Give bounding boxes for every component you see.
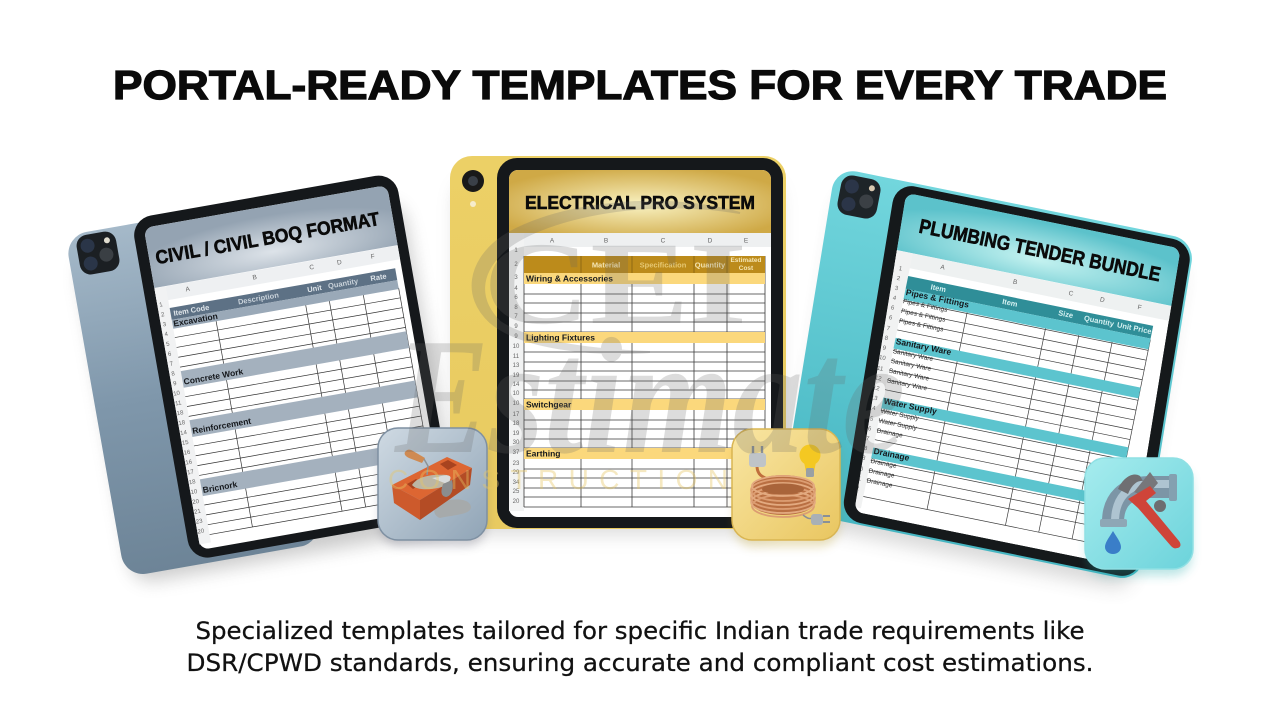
- electrical spreadsheet: D: [708, 238, 713, 244]
- electrical spreadsheet: 23: [513, 461, 520, 467]
- civil spreadsheet: C: [309, 264, 315, 272]
- civil spreadsheet: 18: [178, 420, 186, 427]
- electrical spreadsheet: 34: [513, 480, 520, 486]
- electrical spreadsheet: 4: [514, 286, 518, 292]
- electrical spreadsheet: 11: [513, 354, 520, 360]
- panel: civil tablet: [64, 172, 459, 585]
- civil camera: [75, 230, 121, 276]
- plumbing spreadsheet: 8: [884, 336, 889, 342]
- electrical spreadsheet: 6: [514, 295, 518, 301]
- plumbing spreadsheet: Drainage: [868, 468, 895, 480]
- plumbing spreadsheet: 12: [872, 385, 881, 393]
- civil spreadsheet: 11: [175, 400, 183, 407]
- civil spreadsheet: A: [185, 286, 191, 293]
- civil spreadsheet: 17: [187, 469, 195, 476]
- electrical spreadsheet: 17: [513, 412, 520, 418]
- electrical spreadsheet: 7: [514, 314, 518, 320]
- electrical spreadsheet: 25: [513, 489, 520, 495]
- plumbing spreadsheet: Sanitary Ware: [890, 358, 932, 373]
- description text: [186, 617, 1094, 677]
- panel: electrical tablet: [450, 156, 786, 535]
- electrical spreadsheet: 3: [514, 275, 518, 281]
- plumbing spreadsheet: Drainage: [866, 477, 893, 490]
- plumbing spreadsheet: [856, 250, 1172, 542]
- plumbing spreadsheet: Sanitary Ware: [888, 368, 930, 383]
- civil spreadsheet: 15: [182, 440, 190, 447]
- electrical spreadsheet: Specification: [640, 260, 687, 270]
- civil spreadsheet: 4: [164, 332, 169, 338]
- plumbing screen: [856, 194, 1180, 559]
- electrical spreadsheet: 19: [513, 431, 520, 437]
- plumbing spreadsheet: F: [1137, 304, 1142, 312]
- civil spreadsheet: Rate: [370, 271, 387, 283]
- plumbing spreadsheet: 22: [852, 485, 860, 493]
- electrical screen: [509, 170, 771, 517]
- plumbing spreadsheet: Unit Price: [1116, 320, 1152, 336]
- icon: brick and trowel: [378, 428, 487, 546]
- civil spreadsheet: 18: [176, 410, 185, 417]
- plumbing spreadsheet: D: [1099, 296, 1106, 304]
- electrical spreadsheet: 14: [513, 382, 520, 388]
- civil bezel: [131, 172, 455, 561]
- panel: plumbing tablet: [780, 167, 1207, 591]
- plumbing spreadsheet: Pipes & Fittings: [905, 287, 970, 310]
- electrical spreadsheet: Estimated: [730, 257, 762, 264]
- civil spreadsheet: Concrete Work: [183, 366, 244, 387]
- civil spreadsheet: Unit: [307, 283, 323, 294]
- civil spreadsheet: 20: [192, 499, 200, 506]
- plumbing spreadsheet: 10: [878, 355, 887, 362]
- civil screen: [144, 185, 444, 550]
- electrical spreadsheet: 29: [513, 470, 520, 476]
- civil spreadsheet: 3: [162, 322, 167, 328]
- plumbing spreadsheet: Pipes & Fittings: [902, 298, 949, 314]
- civil spreadsheet: Description: [237, 290, 280, 307]
- plumbing spreadsheet: Item: [1001, 297, 1019, 309]
- watermark: CEI Estimate Construction: CEI: [483, 218, 747, 349]
- plumbing spreadsheet: 7: [886, 326, 891, 333]
- plumbing spreadsheet: 3: [894, 286, 899, 292]
- plumbing spreadsheet: 6: [888, 315, 893, 322]
- plumbing spreadsheet: 17: [862, 435, 870, 443]
- plumbing spreadsheet: 31: [854, 475, 862, 483]
- plumbing spreadsheet: 16: [864, 425, 872, 433]
- civil spreadsheet: Excavation: [173, 311, 218, 329]
- civil spreadsheet: 5: [166, 342, 171, 348]
- plumbing tablet back: [780, 167, 1195, 582]
- plumbing spreadsheet: 18: [860, 445, 868, 452]
- plumbing spreadsheet: Sanitary Ware: [892, 348, 934, 363]
- civil spreadsheet: 10: [190, 489, 199, 496]
- plumbing spreadsheet: 15: [866, 416, 874, 423]
- plumbing spreadsheet: Drainage: [876, 427, 904, 440]
- plumbing spreadsheet: 18: [858, 455, 866, 462]
- icon: pipe and wrench: [1085, 458, 1193, 576]
- plumbing spreadsheet: 30: [856, 466, 864, 473]
- electrical spreadsheet: B: [604, 238, 608, 244]
- watermark: construction line: CONSTRUCTION: [388, 464, 728, 495]
- electrical spreadsheet: 2: [514, 262, 518, 268]
- electrical spreadsheet: Quantity: [695, 260, 726, 270]
- plumbing spreadsheet: 9: [882, 345, 887, 352]
- electrical spreadsheet: 10: [513, 344, 520, 350]
- plumbing spreadsheet: 12: [874, 375, 883, 383]
- plumbing spreadsheet: Drainage: [873, 446, 911, 463]
- civil spreadsheet: F: [370, 253, 375, 261]
- electrical spreadsheet: 10: [513, 401, 520, 407]
- civil spreadsheet: Reinforcement: [191, 416, 252, 436]
- electrical spreadsheet: Wiring & Accessories: [526, 274, 613, 284]
- electrical spreadsheet: 13: [513, 363, 520, 369]
- civil spreadsheet: 14: [180, 430, 188, 437]
- watermark: CEI Estimate Construction: [393, 202, 905, 488]
- electrical screen title: ELECTRICAL PRO SYSTEM: [525, 192, 755, 213]
- electrical spreadsheet: 8: [514, 305, 518, 311]
- description text: DSR/CPWD standards, ensuring accurate and compliant cost estimations.: [186, 649, 1094, 677]
- watermark: CEI Estimate Construction: Estimate: [393, 304, 905, 488]
- description text: Specialized templates tailored for specific Indian trade requirements like: [196, 617, 1084, 645]
- plumbing spreadsheet: 6: [890, 305, 895, 312]
- electrical spreadsheet: C: [661, 238, 666, 244]
- title: PORTAL-READY TEMPLATES FOR EVERY TRADE: [113, 62, 1167, 108]
- plumbing spreadsheet: Drainage: [870, 458, 897, 470]
- electrical camera: [462, 170, 484, 207]
- civil spreadsheet: 18: [189, 479, 197, 486]
- plumbing spreadsheet: 13: [870, 395, 879, 402]
- plumbing camera: [836, 174, 882, 220]
- civil screen title: CIVIL / CIVIL BOQ FORMAT: [154, 209, 382, 269]
- electrical spreadsheet: Cost: [739, 265, 754, 272]
- electrical tablet back: [450, 156, 786, 529]
- plumbing spreadsheet: Item: [930, 282, 947, 294]
- electrical spreadsheet: 18: [513, 421, 520, 427]
- civil spreadsheet: 8: [171, 371, 176, 378]
- civil spreadsheet: 6: [168, 351, 173, 358]
- civil spreadsheet: 10: [173, 390, 181, 398]
- plumbing spreadsheet: Sanitary Ware: [895, 336, 953, 357]
- civil spreadsheet: 1: [159, 302, 164, 309]
- civil spreadsheet: 21: [194, 509, 202, 516]
- electrical spreadsheet: 30: [513, 440, 520, 446]
- electrical spreadsheet: E: [744, 238, 749, 244]
- civil spreadsheet: Bricnork: [202, 479, 238, 495]
- plumbing spreadsheet: Pipes & Fittings: [900, 308, 947, 324]
- civil spreadsheet: Quantity: [327, 276, 360, 291]
- electrical spreadsheet: [509, 233, 771, 511]
- civil spreadsheet: [154, 245, 443, 544]
- plumbing spreadsheet: Water Supply: [878, 418, 918, 432]
- electrical spreadsheet: 9: [514, 324, 518, 330]
- plumbing screen title: PLUMBING TENDER BUNDLE: [917, 216, 1163, 286]
- electrical spreadsheet: 37: [513, 450, 520, 456]
- plumbing spreadsheet: C: [1068, 290, 1074, 298]
- electrical spreadsheet: 19: [513, 373, 520, 379]
- plumbing spreadsheet: 11: [876, 366, 884, 373]
- electrical spreadsheet: 20: [513, 499, 520, 505]
- plumbing spreadsheet: 4: [892, 295, 897, 302]
- icon: cable coil, plug and bulb: [732, 429, 840, 547]
- plumbing spreadsheet: B: [1012, 279, 1018, 286]
- electrical bezel: [497, 158, 783, 528]
- electrical spreadsheet: 10: [513, 391, 520, 397]
- civil spreadsheet: 2: [161, 312, 166, 319]
- civil spreadsheet: 9: [173, 381, 178, 388]
- plumbing spreadsheet: 1: [898, 266, 903, 273]
- civil spreadsheet: 23: [195, 519, 204, 526]
- electrical spreadsheet: 1: [514, 248, 518, 254]
- electrical spreadsheet: Earthing: [526, 448, 560, 458]
- plumbing spreadsheet: Water Supply: [880, 408, 920, 423]
- civil tablet back: [65, 201, 322, 577]
- civil spreadsheet: 7: [169, 361, 174, 368]
- plumbing spreadsheet: Pipes & Fittings: [898, 318, 945, 334]
- electrical spreadsheet: Material: [592, 260, 620, 270]
- civil spreadsheet: 20: [197, 528, 205, 536]
- plumbing spreadsheet: A: [940, 264, 946, 272]
- plumbing spreadsheet: Water Supply: [883, 396, 938, 416]
- civil spreadsheet: Item Code: [173, 303, 210, 318]
- plumbing spreadsheet: Size: [1057, 308, 1074, 320]
- plumbing spreadsheet: 2: [896, 276, 901, 283]
- civil spreadsheet: D: [336, 259, 343, 267]
- plumbing bezel: [841, 183, 1193, 579]
- electrical spreadsheet: Switchgear: [526, 400, 572, 410]
- electrical spreadsheet: Lighting Fixtures: [526, 332, 595, 342]
- electrical spreadsheet: 9: [514, 334, 518, 340]
- civil spreadsheet: B: [252, 274, 257, 282]
- plumbing spreadsheet: 14: [868, 405, 877, 412]
- plumbing spreadsheet: Sanitary Ware: [886, 377, 928, 393]
- plumbing spreadsheet: Quantity: [1083, 314, 1116, 329]
- civil spreadsheet: 16: [185, 459, 193, 467]
- civil spreadsheet: 16: [183, 450, 192, 457]
- electrical spreadsheet: A: [550, 238, 555, 244]
